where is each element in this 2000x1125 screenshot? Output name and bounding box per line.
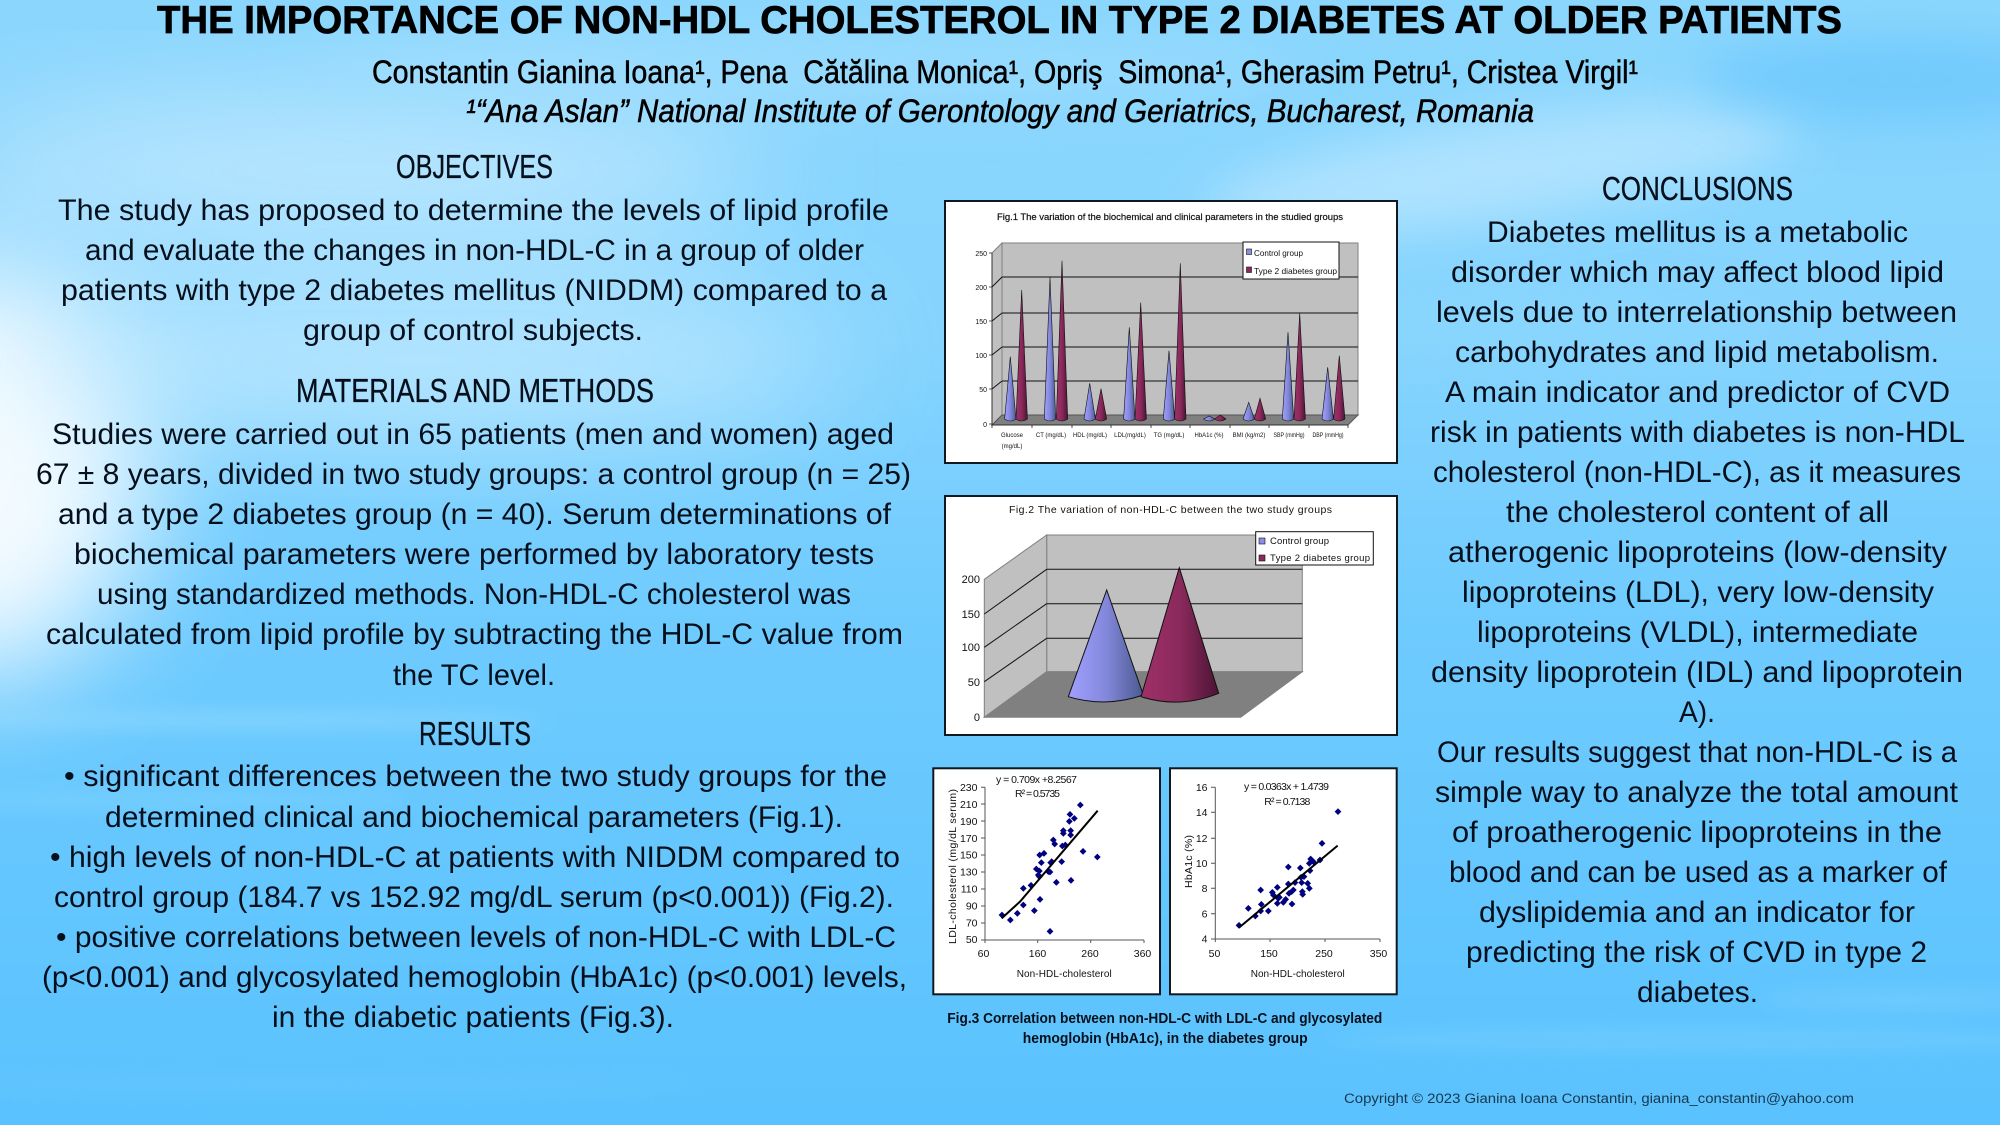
y axis labels: 90 (966, 900, 978, 912)
caption: Fig.3: Fig.3 Correlation between non-HDL-C with LDL-C and glycosylated (947, 1011, 1382, 1027)
y axis labels: 130 (960, 866, 978, 878)
legend: Type 2 diabetes group (1270, 553, 1370, 564)
heading: results: RESULTS (419, 715, 531, 752)
text block: conclusions: levels due to interrelationship between (1436, 296, 1957, 329)
text block: results: (p<0.001) and glycosylated hemoglobin (HbA1c) (p<0.001) levels, (42, 961, 907, 994)
y axis title: LDL-cholesterol (mg/dL serum) (947, 789, 959, 944)
x axis labels: Glucose (1001, 433, 1024, 439)
equation: R² = 0.7138 (1264, 796, 1310, 808)
text block: conclusions: the cholesterol content of all (1506, 496, 1889, 529)
text block: conclusions: of proatherogenic lipoproteins in the (1452, 816, 1942, 849)
text block: conclusions: A main indicator and predictor of CVD (1445, 376, 1950, 409)
text block: conclusions: lipoproteins (LDL), very low-density (1462, 576, 1934, 609)
caption: Fig.3: hemoglobin (HbA1c), in the diabetes group (1023, 1031, 1308, 1047)
text block: conclusions: diabetes. (1637, 976, 1758, 1009)
equation (1244, 781, 1329, 808)
y axis labels: 150 (960, 850, 978, 862)
x axis title: Non-HDL-cholesterol (1017, 969, 1112, 980)
text block: conclusions: density lipoprotein (IDL) and lipoprotein (1431, 656, 1963, 689)
x axis labels: DBP (mmHg) (1312, 433, 1344, 439)
text block: conclusions: dyslipidemia and an indicator for (1479, 896, 1915, 929)
y axis labels: 12 (1196, 833, 1208, 845)
text block: methods: 67 ± 8 years, divided in two study groups: a control group (n = 25) (36, 458, 911, 491)
y axis labels: 170 (960, 833, 978, 845)
axes (981, 787, 1144, 943)
chart title: Fig.2: Fig.2 The variation of non-HDL-C between the two study groups (1009, 504, 1332, 516)
y axis labels: 8 (1202, 883, 1208, 895)
legend (1256, 532, 1373, 565)
copyright: Copyright © 2023 Gianina Ioana Constantin, gianina_constantin@yahoo.com (1344, 1091, 1854, 1106)
data points and trend line (999, 802, 1100, 934)
text block: methods (36, 418, 911, 692)
data points and trend line (1236, 809, 1341, 928)
text block: conclusions: predicting the risk of CVD in type 2 (1466, 936, 1927, 969)
x axis labels (1001, 433, 1344, 450)
y axis labels: 0 (983, 422, 987, 429)
x axis labels: 60 (978, 948, 989, 960)
x axis labels (1209, 948, 1387, 960)
y axis labels: 10 (1196, 858, 1208, 870)
panel: results (42, 715, 907, 1034)
text block: objectives: and evaluate the changes in non-HDL-C in a group of older (85, 234, 864, 267)
text block: conclusions: risk in patients with diabetes is non-HDL (1430, 416, 1965, 449)
text block: conclusions: lipoproteins (VLDL), intermediate (1477, 616, 1918, 649)
y axis labels: 230 (960, 782, 978, 794)
text block: objectives: group of control subjects. (303, 314, 643, 347)
text block: conclusions: carbohydrates and lipid metabolism. (1455, 336, 1939, 369)
text block: results: in the diabetic patients (Fig.3). (272, 1001, 674, 1034)
cone: diabetes group (1141, 568, 1219, 702)
y axis labels: 50 (979, 387, 987, 394)
x axis labels: LDL(mg/dL) (1114, 433, 1146, 439)
text block: objectives (58, 194, 889, 347)
text block: conclusions: Our results suggest that non-HDL-C is a (1437, 736, 1957, 769)
text block: objectives: patients with type 2 diabetes mellitus (NIDDM) compared to a (61, 274, 887, 307)
y axis labels: 6 (1202, 908, 1208, 920)
y axis labels: 150 (975, 319, 987, 326)
text block: methods: biochemical parameters were performed by laboratory tests (74, 538, 874, 571)
x axis labels: SBP (mmHg) (1274, 433, 1304, 439)
equation: R² = 0.5735 (1015, 788, 1060, 800)
diabetes group cones (1016, 261, 1345, 421)
text block: results (42, 760, 907, 1034)
y axis labels: 0 (974, 712, 980, 724)
affiliation: ¹“Ana Aslan” National Institute of Gerontology and Geriatrics, Bucharest, Romania (466, 93, 1534, 129)
heading: materials and methods: MATERIALS AND METHODS (296, 372, 654, 409)
text block: methods: the TC level. (393, 659, 555, 692)
y axis labels (960, 782, 978, 946)
x axis labels: 160 (1029, 948, 1046, 960)
chart walls and floor (984, 535, 1302, 717)
y axis labels: 100 (962, 642, 980, 654)
x axis labels: CT (mg/dL) (1036, 433, 1066, 439)
control group cones (1005, 277, 1333, 421)
y axis labels: 50 (968, 677, 980, 689)
y axis labels: 200 (962, 574, 980, 586)
authors: Constantin Gianina Ioana¹, Pena Cătălina Monica¹, Opriş Simona¹, Gherasim Petru¹, Cristea Virgil¹ (372, 54, 1638, 90)
y axis labels (962, 574, 980, 724)
heading: objectives: OBJECTIVES (396, 148, 553, 185)
x axis labels: 350 (1370, 948, 1387, 960)
x axis labels: HDL (mg/dL) (1073, 433, 1107, 439)
title: THE IMPORTANCE OF NON-HDL CHOLESTEROL IN TYPE 2 DIABETES AT OLDER PATIENTS (157, 0, 1842, 42)
y axis labels (975, 251, 987, 429)
y axis labels: 16 (1196, 782, 1208, 794)
x axis labels: TG (mg/dL) (1154, 433, 1184, 439)
chart title: Fig.1: Fig.1 The variation of the biochemical and clinical parameters in the studied groups (997, 212, 1343, 223)
x axis labels: HbA1c (%) (1194, 433, 1224, 439)
y axis title: HbA1c (%) (1183, 835, 1195, 888)
y axis labels: 4 (1202, 934, 1208, 946)
chart: Fig.1 cone chart of biochemical and clinical parameters (945, 201, 1397, 463)
equation (996, 774, 1077, 800)
heading: conclusions: CONCLUSIONS (1602, 170, 1793, 207)
text block: methods: Studies were carried out in 65 patients (men and women) aged (52, 418, 894, 451)
text block: conclusions: simple way to analyze the total amount (1435, 776, 1959, 809)
equation: y = 0.0363x + 1.4739 (1244, 781, 1329, 793)
y axis labels: 100 (975, 353, 987, 360)
y axis labels: 250 (975, 251, 987, 258)
text block: results: • high levels of non-HDL-C at patients with NIDDM compared to (50, 841, 900, 874)
legend: Type 2 diabetes group (1254, 266, 1337, 276)
y axis labels: 200 (975, 285, 987, 292)
chart: Fig.3 right scatter HbA1c vs non-HDL-cholesterol (1170, 768, 1397, 994)
text block: conclusions: Diabetes mellitus is a metabolic (1487, 216, 1908, 249)
x axis labels: 150 (1260, 948, 1278, 960)
axes (1211, 787, 1380, 942)
panel: materials and methods (36, 372, 911, 692)
y axis labels: 150 (962, 609, 980, 621)
text block: conclusions (1430, 216, 1965, 1009)
text block: conclusions: A). (1679, 696, 1715, 729)
chart walls and floor (989, 243, 1358, 428)
y axis labels: 210 (960, 799, 978, 811)
y axis labels: 50 (966, 934, 978, 946)
x axis labels: 250 (1315, 948, 1333, 960)
caption: Fig.3 (947, 1011, 1382, 1047)
x axis labels: 260 (1081, 948, 1099, 960)
text block: results: control group (184.7 vs 152.92 mg/dL serum (p<0.001)) (Fig.2). (54, 881, 894, 914)
y axis labels: 110 (961, 884, 978, 896)
panel: conclusions (1430, 170, 1965, 1009)
x axis labels: (mg/dL) (1002, 444, 1022, 450)
text block: conclusions: blood and can be used as a marker of (1449, 856, 1948, 889)
text block: conclusions: disorder which may affect blood lipid (1451, 256, 1944, 289)
x axis labels: 50 (1209, 948, 1220, 960)
chart: Fig.2 non-HDL-C cone chart (945, 496, 1397, 735)
text block: conclusions: atherogenic lipoproteins (low-density (1448, 536, 1947, 569)
x axis title: Non-HDL-cholesterol (1251, 969, 1345, 980)
y axis labels: 190 (960, 816, 978, 828)
x axis labels: 360 (1134, 948, 1151, 960)
y axis labels (1196, 782, 1208, 946)
text block: conclusions: cholesterol (non-HDL-C), as it measures (1433, 456, 1961, 489)
equation: y = 0.709x +8.2567 (996, 774, 1077, 786)
text block: methods: calculated from lipid profile by subtracting the HDL-C value from (46, 618, 903, 651)
text block: results: • positive correlations between levels of non-HDL-C with LDL-C (56, 921, 896, 954)
y axis labels: 14 (1196, 807, 1208, 819)
y axis labels: 70 (966, 918, 978, 930)
text block: objectives: The study has proposed to determine the levels of lipid profile (58, 194, 889, 227)
text block: results: • significant differences between the two study groups for the (64, 760, 887, 793)
text block: methods: using standardized methods. Non-HDL-C cholesterol was (97, 578, 851, 611)
text block: results: determined clinical and biochemical parameters (Fig.1). (105, 801, 843, 834)
legend: Control group (1254, 248, 1303, 258)
panel: objectives (58, 148, 889, 347)
text block: methods: and a type 2 diabetes group (n = 40). Serum determinations of (58, 498, 892, 531)
x axis labels: BMI (kg/m2) (1233, 433, 1265, 439)
legend: Control group (1270, 536, 1329, 547)
legend (1243, 242, 1339, 279)
cone: control group (1068, 590, 1143, 702)
x axis labels (978, 948, 1151, 960)
chart: Fig.3 left scatter LDL-cholesterol vs non-HDL-cholesterol (933, 768, 1160, 994)
